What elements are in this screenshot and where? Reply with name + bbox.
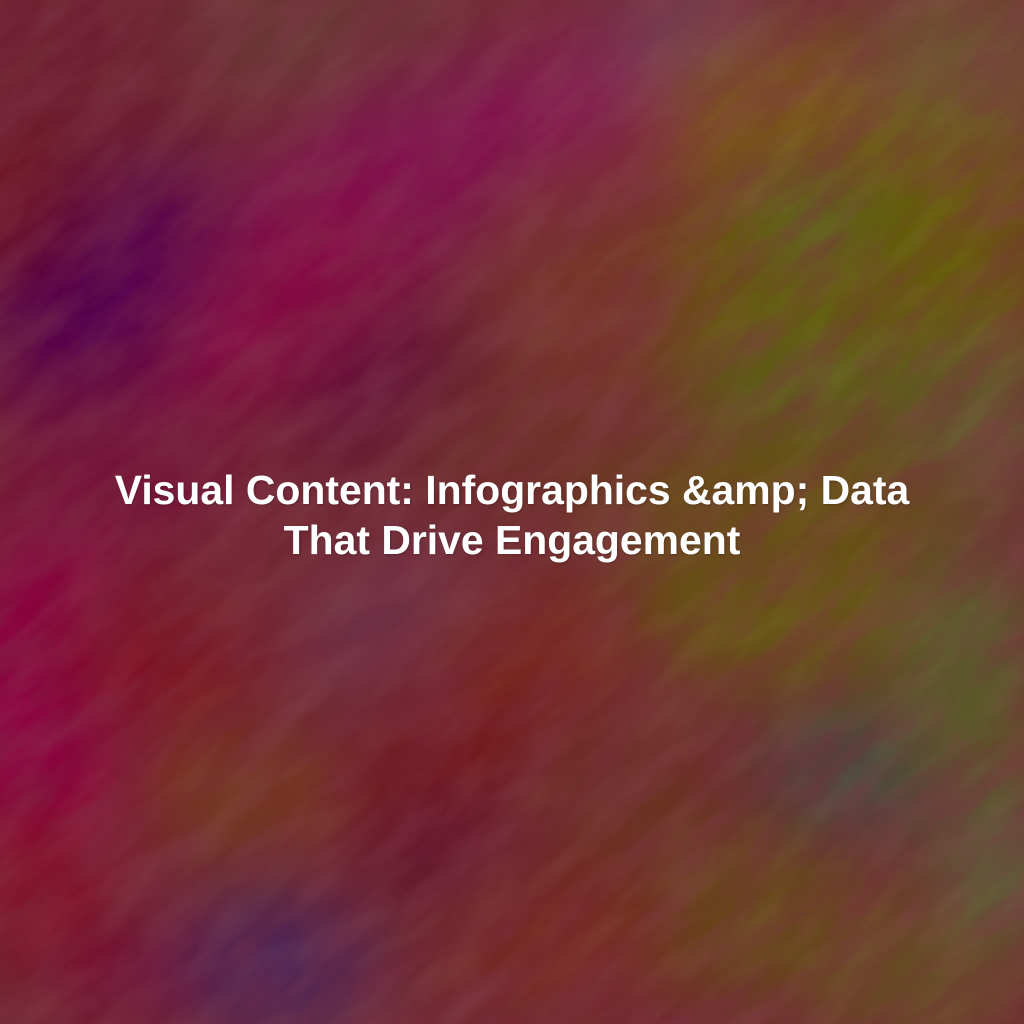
title: Visual Content: Infographics &amp; Data (115, 467, 909, 513)
title (115, 467, 910, 564)
title: That Drive Engagement (284, 517, 740, 563)
